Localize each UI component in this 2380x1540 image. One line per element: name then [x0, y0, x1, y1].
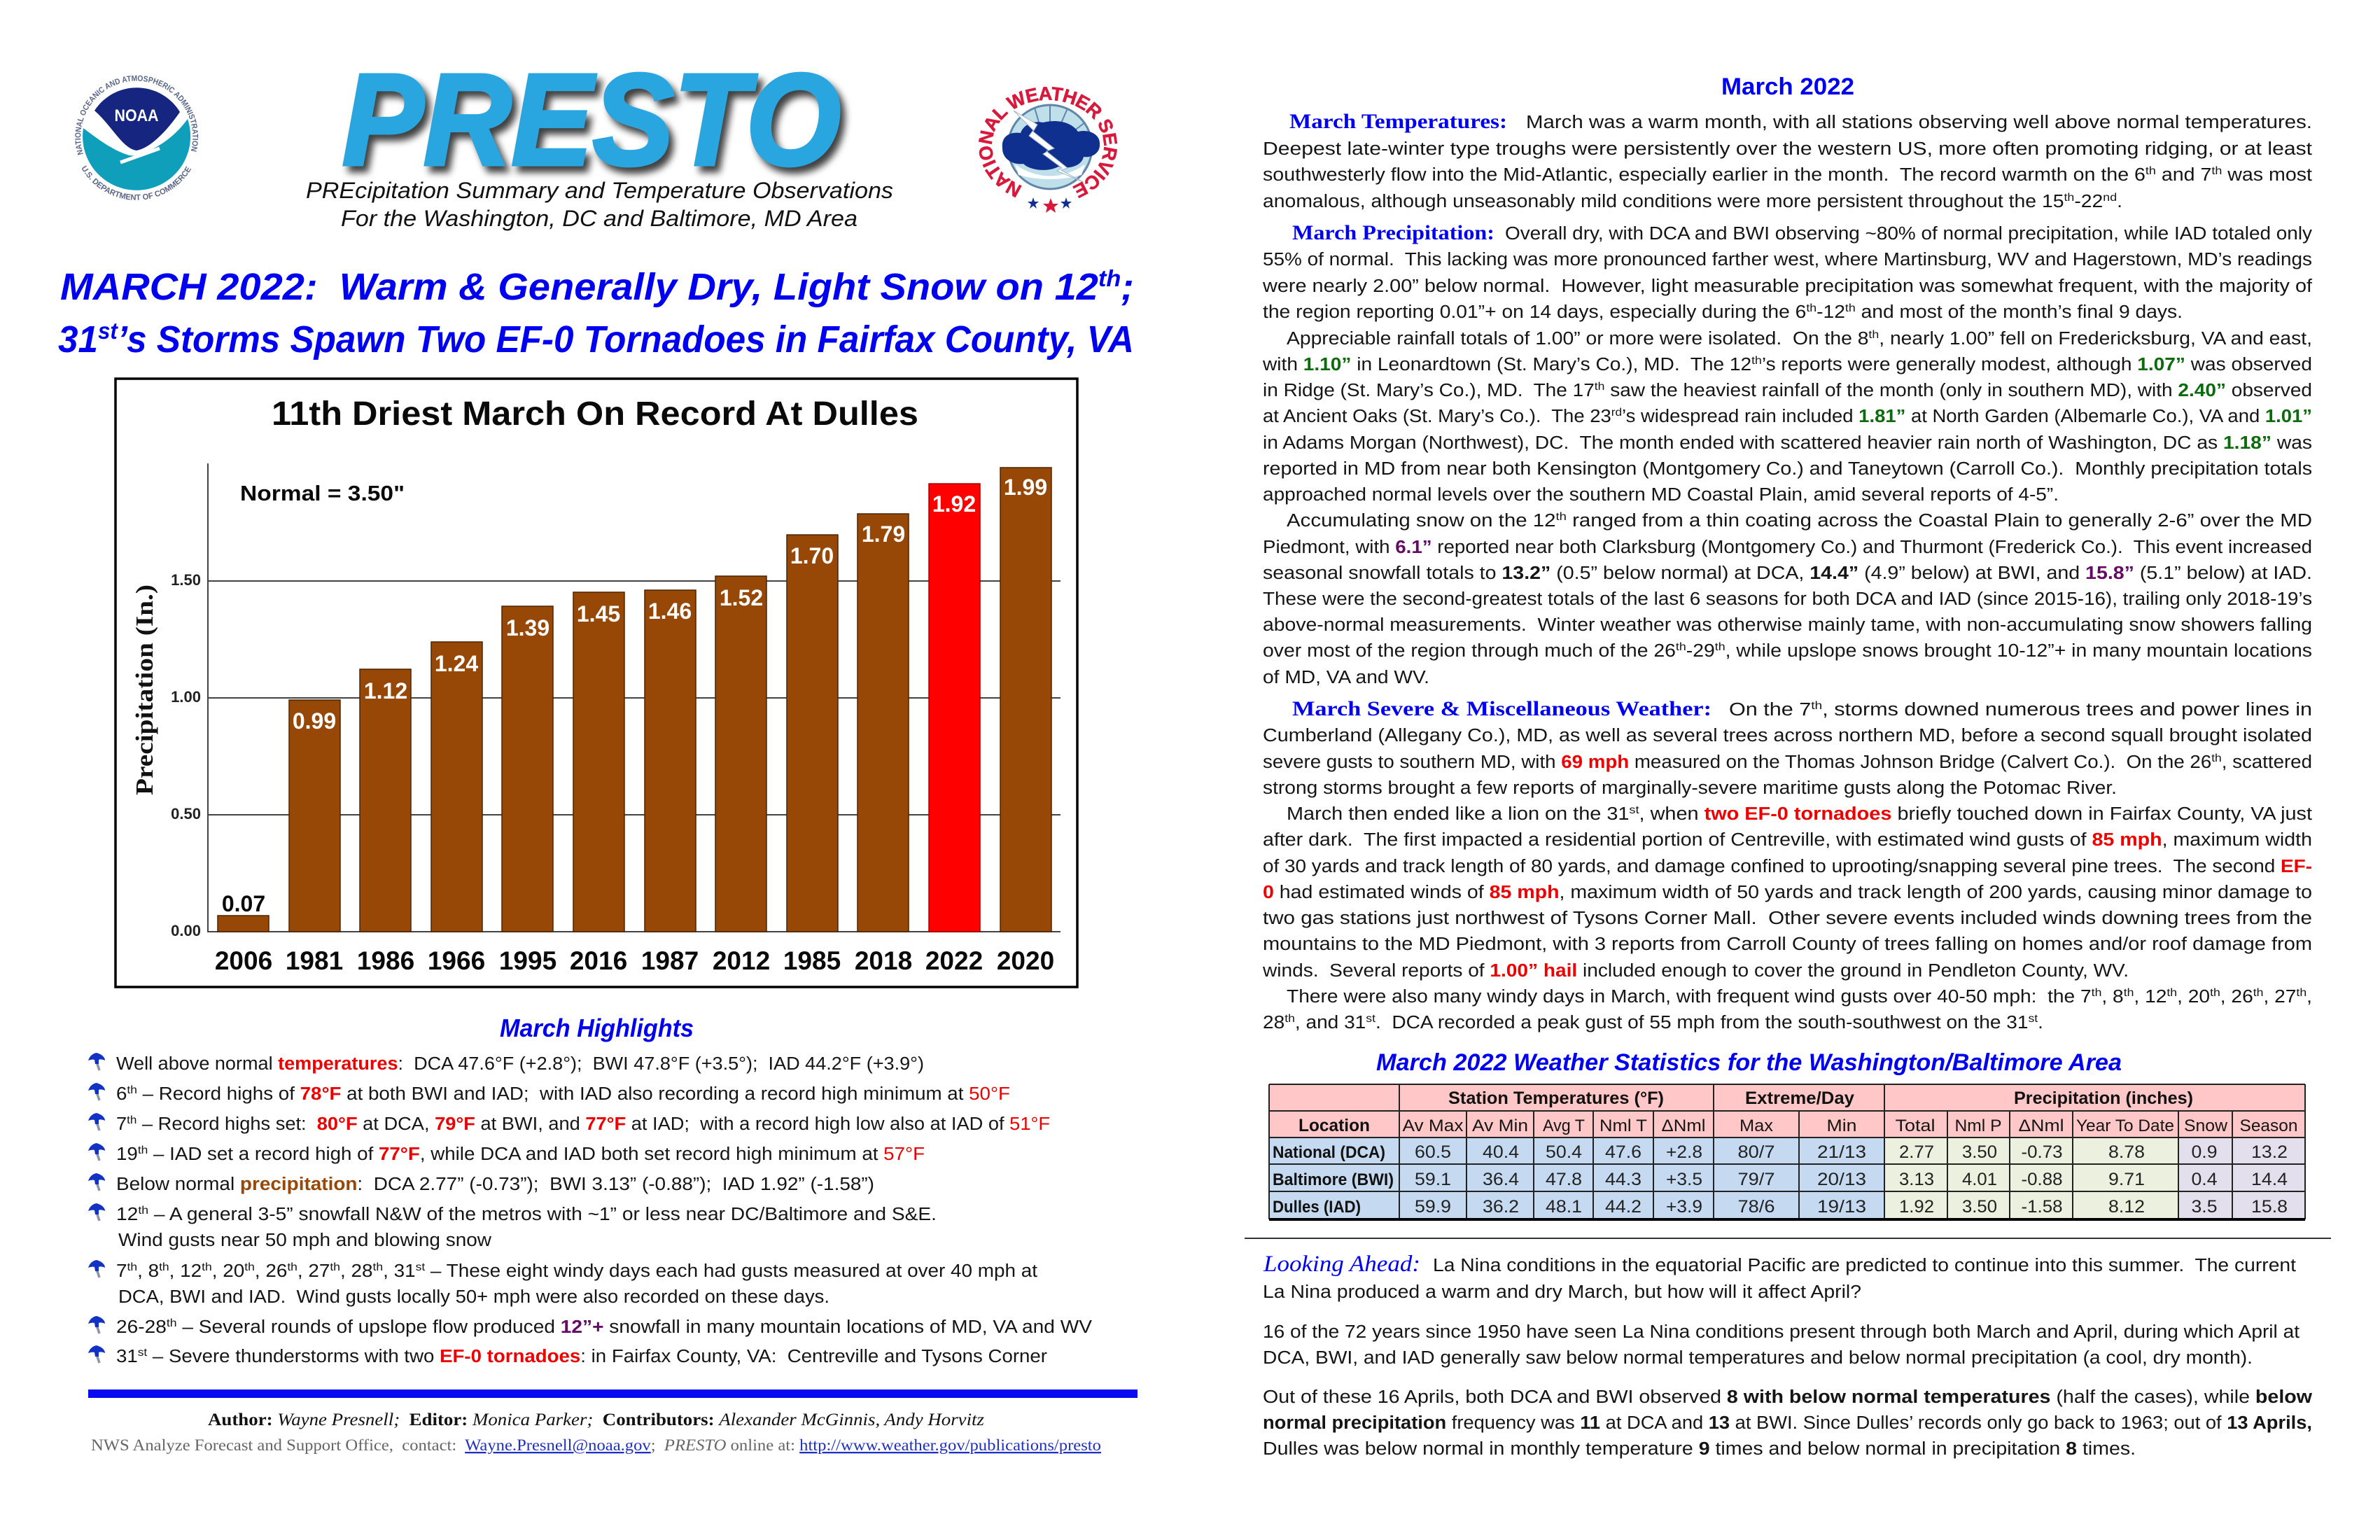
paragraph: tornadoes: 0 had estimated winds of 85 mph , maximum width of 50 yards and track length of 200 yards, causing minor damage to — [1263, 883, 2312, 902]
table row: Baltimore: 47.8 — [1546, 1170, 1582, 1189]
paragraph: statistics: Out of these 16 Aprils, both DCA and BWI observed 8 with below normal temperatures (half the cases), while below — [1263, 1387, 2312, 1407]
paragraph: storms: severe gusts to southern MD, with 69 mph measured on the Thomas Johnson Bridge (Calvert Co.). On the 26 th, scattered — [1263, 752, 2312, 772]
panel: March Highlights — [88, 1014, 1092, 1366]
table row: Baltimore: 4.01 — [1962, 1170, 1997, 1189]
table row: National: 21/13 — [1817, 1142, 1866, 1162]
table row: Baltimore: Baltimore (BWI) — [1273, 1170, 1394, 1189]
bar values: 1.70 — [790, 543, 834, 568]
paragraph: snow: over most of the region through much of the 26 th-29 th, while upslope snows brought 10-12”+ in many mountain locations — [1263, 641, 2312, 661]
paragraph: rainfall: Appreciable rainfall totals of 1.00” or more were isolated. On the 8 th, nearly 1.00” fell on Fredericksburg, VA and east, — [1287, 329, 2312, 349]
bar values: 1.12 — [364, 678, 407, 704]
table group headers: Precipitation (inches) — [2014, 1088, 2193, 1108]
table column headers: Location — [1298, 1116, 1370, 1135]
table column headers: Total — [1896, 1116, 1935, 1135]
paragraph: tornadoes: March then ended like a lion on the 31 st, when two EF-0 tornadoes briefly touched down in Fairfax County, VA just — [1287, 804, 2312, 824]
NWS dial spokes — [1035, 105, 1085, 133]
highlight list: Wind gusts near 50 mph and blowing snow — [118, 1231, 492, 1250]
subhead: March Temperatures: — [1289, 110, 1507, 133]
table column headers: Year To Date — [2076, 1116, 2174, 1135]
y axis labels — [171, 571, 201, 939]
table row: National: 2.77 — [1899, 1142, 1934, 1162]
table row: National: -0.73 — [2022, 1142, 2062, 1162]
table heading: March 2022 Weather Statistics for the Washington/Baltimore Area — [1376, 1049, 2122, 1076]
year labels: 2018 — [855, 946, 912, 975]
y axis title: Precipitation (In.) — [131, 584, 158, 795]
paragraph: tornadoes — [1262, 804, 2312, 981]
paragraph: history: 16 of the 72 years since 1950 have seen La Nina conditions present through both March and April, during which April at — [1263, 1322, 2300, 1342]
logo: National Weather Service — [979, 87, 1117, 213]
table column headers: ΔNml — [1662, 1116, 1705, 1135]
author line: Author: Wayne Presnell; Editor: Monica Parker; Contributors: Alexander McGinnis, Andy Horvitz — [208, 1410, 984, 1429]
paragraph: rainfall: reported in MD from near both Kensington (Montgomery Co.) and Taneytown (Carroll Co.). Monthly precipitation totals — [1263, 459, 2312, 479]
paragraph — [1263, 113, 2312, 211]
table row: National: 50.4 — [1546, 1142, 1582, 1162]
paragraph: snow: above-normal measurements. Winter weather was otherwise mainly tame, with non-accumulating snow showers falling — [1263, 615, 2312, 635]
table row: Baltimore: -0.88 — [2022, 1170, 2062, 1189]
highlight list: 6th – Record highs of 78°F at both BWI and IAD; with IAD also recording a record high minimum at 50°F — [116, 1084, 1010, 1104]
table row: Dulles — [1273, 1197, 2288, 1217]
bar values: 1.99 — [1004, 475, 1047, 500]
section: March Severe & Miscellaneous Weather — [1262, 697, 2312, 1032]
year labels: 2006 — [215, 946, 272, 975]
paragraph: overview — [1262, 224, 2313, 322]
blue divider bar — [88, 1390, 1138, 1398]
statistics table — [1269, 1084, 2305, 1219]
year labels — [215, 946, 1054, 975]
paragraph: rainfall: in Ridge (St. Mary’s Co.), MD. The 17 th saw the heaviest rainfall of the month (only in southern MD), with 2.40” observed — [1263, 381, 2312, 400]
paragraph: statistics — [1263, 1387, 2312, 1459]
bar values — [222, 475, 1047, 916]
table row: National: 3.50 — [1962, 1142, 1997, 1162]
paragraph: overview: the region reporting 0.01”+ on 14 days, especially during the 6 th-12th and most of the month’s final 9 days. — [1263, 302, 2183, 322]
table group headers: Station Temperatures (°F) — [1448, 1088, 1664, 1108]
y axis labels: 0.00 — [171, 922, 201, 939]
paragraph: wind — [1263, 987, 2312, 1032]
bar values: 1.46 — [648, 598, 692, 624]
highlight list: Below normal precipitation : DCA 2.77” (-0.73”); BWI 3.13” (-0.88”); IAD 1.92” (-1.58”) — [116, 1175, 874, 1194]
NOAA navy sky — [94, 88, 180, 150]
table row: Dulles: 1.92 — [1899, 1197, 1934, 1217]
y axis labels: 1.50 — [171, 571, 201, 589]
table row: National: 8.78 — [2108, 1142, 2145, 1162]
credits — [91, 1410, 1101, 1454]
year labels: 2020 — [997, 946, 1054, 975]
paragraph: outlook: La Nina produced a warm and dry March, but how will it affect April? — [1263, 1282, 1861, 1302]
table row: Dulles: 3.5 — [2191, 1197, 2218, 1217]
paragraph: wind: 28th, and 31 st. DCA recorded a peak gust of 55 mph from the south-southwest on the 31 st. — [1263, 1013, 2043, 1032]
NWS cloud — [1002, 121, 1100, 170]
table row: Dulles: 48.1 — [1546, 1197, 1582, 1217]
y axis labels: 0.50 — [171, 805, 201, 822]
NWS white band — [1015, 164, 1085, 179]
table row: Dulles: 78/6 — [1737, 1197, 1775, 1217]
heading: March 2022: March 2022 — [1721, 74, 1854, 100]
table column headers: Nml T — [1600, 1116, 1647, 1135]
chart frame — [115, 379, 1077, 987]
title line 1: MARCH 2022: Warm & Generally Dry, Light Snow on 12 th; — [60, 265, 1134, 308]
NOAA teal ocean — [83, 119, 190, 190]
table column headers: Av Min — [1472, 1116, 1528, 1135]
table row: Baltimore: 79/7 — [1737, 1170, 1775, 1189]
table row: Dulles: 36.2 — [1483, 1197, 1519, 1217]
highlight list: 26-28 th – Several rounds of upslope flow produced 12”+ snowfall in many mountain locations of MD, VA and WV — [116, 1317, 1092, 1337]
highlight list: 7th – Record highs set: 80°F at DCA, 79°F at BWI, and 77°F at IAD; with a record high low also at IAD of 51°F — [116, 1114, 1050, 1134]
table row: Baltimore: 0.4 — [2191, 1170, 2218, 1189]
table row: National: 0.9 — [2191, 1142, 2218, 1162]
bar values: 1.92 — [932, 491, 976, 517]
table row: National: 13.2 — [2251, 1142, 2288, 1162]
table row: Dulles: -1.58 — [2022, 1197, 2062, 1217]
bar values: 0.07 — [222, 891, 265, 916]
paragraph: tornadoes: mountains to the MD Piedmont, with 3 reports from Carroll County of trees falling on homes and/or roof damage from — [1263, 934, 2312, 954]
table row: National: 60.5 — [1415, 1142, 1451, 1162]
year labels: 2012 — [713, 946, 770, 975]
paragraph: tornadoes: winds. Several reports of 1.00” hail included enough to cover the ground in Pendleton County, WV. — [1262, 961, 2129, 981]
table group headers: Extreme/Day — [1745, 1088, 1854, 1108]
paragraph: wind: There were also many windy days in March, with frequent wind gusts over 40-50 mph: the 7 th, 8th, 12 th, 20 th, 26 th, 27 th, — [1287, 987, 2312, 1007]
paragraph: rainfall — [1262, 329, 2312, 505]
subhead: March Precipitation: — [1292, 221, 1494, 244]
bar values: 1.39 — [506, 615, 550, 640]
subtitle — [306, 178, 893, 231]
year labels: 2016 — [570, 946, 627, 975]
bar values: 1.79 — [862, 522, 905, 547]
NOAA wordmark: NOAA — [115, 106, 158, 125]
paragraph: snow: These were the second-greatest totals of the last 6 seasons for both DCA and IAD (since 2015-16), trailing only 2018-19’s — [1263, 589, 2312, 609]
highlight list: DCA, BWI and IAD. Wind gusts locally 50+ mph were also recorded on these days. — [118, 1287, 830, 1307]
paragraph: tornadoes: of 30 yards and track length of 80 yards, and damage confined to uprooting/snapping several pine trees. The second EF- — [1263, 857, 2312, 876]
highlight list: 19th – IAD set a record high of 77°F, while DCA and IAD both set record high minimum at 57°F — [116, 1144, 925, 1164]
table row: Dulles: Dulles (IAD) — [1273, 1198, 1361, 1217]
table column headers: Max — [1740, 1116, 1773, 1135]
paragraph: southwesterly flow into the Mid-Atlantic, especially earlier in the month. The record warmth on the 6 th and 7 th was most — [1263, 165, 2312, 185]
NOAA ring text top: NATIONAL OCEANIC AND ATMOSPHERIC ADMINISTRATION — [75, 76, 199, 155]
section: Looking Ahead — [1263, 1252, 2312, 1459]
paragraph: tornadoes: two gas stations just northwest of Tysons Corner Mall. Other severe events included winds downing trees from the — [1263, 909, 2312, 928]
logo: NOAA — [75, 76, 199, 200]
paragraph: rainfall: with 1.10” in Leonardtown (St. Mary’s Co.), MD. The 12 th’s reports were generally modest, although 1.07” was observed — [1262, 355, 2312, 374]
section: March Temperatures — [1263, 110, 2312, 211]
table row: Dulles: 8.12 — [2108, 1197, 2145, 1217]
paragraph: history — [1263, 1322, 2300, 1368]
NWS stars — [1028, 197, 1072, 213]
paragraph: rainfall: in Adams Morgan (Northwest), DC. The month ended with scattered heavier rain north of Washington, DC as 1.18” was — [1263, 433, 2312, 453]
table row: Dulles: 3.50 — [1962, 1197, 1997, 1217]
NOAA gull — [120, 148, 160, 162]
paragraph: overview: were nearly 2.00” below normal. However, light measurable precipitation was somewhat frequent, with the majority of — [1262, 276, 2313, 296]
table group headers — [1448, 1088, 2193, 1108]
table column headers: Min — [1827, 1116, 1856, 1135]
table column headers: Nml P — [1954, 1116, 2002, 1135]
paragraph: snow: Accumulating snow on the 12 th ranged from a thin coating across the Coastal Plain to generally 2-6” over the MD — [1287, 511, 2312, 531]
subtitle line 2: For the Washington, DC and Baltimore, MD Area — [341, 206, 858, 231]
paragraph: history: DCA, BWI, and IAD generally saw below normal temperatures and below normal precipitation (a cool, dry month). — [1263, 1348, 2253, 1368]
bars — [218, 468, 1051, 932]
table row: Baltimore: 44.3 — [1605, 1170, 1642, 1189]
table row: National: 47.6 — [1605, 1142, 1642, 1162]
year labels: 1995 — [499, 946, 556, 975]
paragraph: tornadoes: after dark. The first impacted a residential portion of Centreville, with estimated wind gusts of 85 mph , maximum width — [1263, 830, 2312, 850]
year labels: 1987 — [641, 946, 699, 975]
highlight list: 7th, 8th, 12th, 20th, 26th, 27th, 28th, 31st – These eight windy days each had gusts measured at over 40 mph at — [116, 1261, 1037, 1281]
paragraph: storms: Cumberland (Allegany Co.), MD, as well as several trees across northern MD, before a second squall brought isolated — [1263, 726, 2312, 746]
highlights heading: March Highlights — [500, 1014, 694, 1042]
bar values: 0.99 — [293, 708, 336, 734]
paragraph: anomalous, although unseasonably mild conditions were more persistent throughout the 15 th-22 nd. — [1263, 192, 2122, 211]
table row: Baltimore — [1273, 1170, 2288, 1189]
table row: National: 40.4 — [1483, 1142, 1519, 1162]
year labels: 1986 — [357, 946, 414, 975]
table row: Baltimore: 9.71 — [2108, 1170, 2145, 1189]
paragraph: snow: of MD, VA and WV. — [1263, 668, 1429, 687]
subtitle line 1: PREcipitation Summary and Temperature Observations — [306, 178, 893, 203]
table row: Dulles: 19/13 — [1817, 1197, 1866, 1217]
NWS ring text: NATIONAL WEATHER SERVICE — [979, 87, 1117, 199]
title — [58, 265, 1134, 360]
subhead: Looking Ahead: — [1263, 1252, 1420, 1277]
paragraph: Deepest late-winter type troughs were persistently over the western US, more often promoting ridging, or at least — [1263, 139, 2312, 159]
table row: Dulles: 44.2 — [1605, 1197, 1642, 1217]
highlight list: 12th – A general 3-5” snowfall N&W of the metros with ~1” or less near DC/Baltimore and S&E. — [116, 1205, 937, 1224]
table row: National: 80/7 — [1737, 1142, 1775, 1162]
table column headers: Snow — [2184, 1116, 2228, 1135]
table row: Dulles: +3.9 — [1666, 1197, 1702, 1217]
paragraph: storms: strong storms brought a few reports of marginally-severe maritime gusts along the Potomac River. — [1263, 778, 2117, 798]
bar values: 1.52 — [720, 585, 763, 610]
paragraph: storms — [1263, 700, 2312, 798]
bar values: 1.45 — [577, 601, 620, 626]
table row: National: National (DCA) — [1273, 1143, 1385, 1162]
table row: National: +2.8 — [1666, 1142, 1702, 1162]
logo: PRESTO wordmark: PRESTO — [342, 48, 841, 192]
table row: Dulles: 59.9 — [1415, 1197, 1451, 1217]
paragraph: March was a warm month, with all stations observing well above normal temperatures. — [1526, 113, 2312, 132]
table column headers — [1298, 1116, 2297, 1135]
year labels: 1985 — [783, 946, 841, 975]
table column headers: ΔNml — [2019, 1116, 2064, 1135]
section: March Precipitation — [1262, 221, 2313, 687]
contact line: NWS Analyze Forecast and Support Office, contact: Wayne.Presnell@noaa.gov ; PRESTO online at: http://www.weather.gov/publications/presto — [91, 1436, 1101, 1454]
year labels: 2022 — [925, 946, 983, 975]
paragraph: overview: 55% of normal. This lacking was more pronounced farther west, where Martinsburg, WV and Hagerstown, MD’s readings — [1263, 250, 2312, 270]
NWS lightning — [1014, 111, 1083, 182]
highlight list: 31st – Severe thunderstorms with two EF-0 tornadoes : in Fairfax County, VA: Centreville and Tysons Corner — [116, 1347, 1048, 1366]
year labels: 1981 — [286, 946, 343, 975]
highlight list — [116, 1054, 1092, 1366]
paragraph: rainfall: approached normal levels over the southern MD Coastal Plain, amid several reports of 4-5”. — [1263, 485, 2059, 505]
paragraph: snow: Piedmont, with 6.1” reported near both Clarksburg (Montgomery Co.) and Thurmont (Frederick Co.). This event increased — [1263, 538, 2312, 557]
paragraph: overview: Overall dry, with DCA and BWI observing ~80% of normal precipitation, while IAD totaled only — [1505, 224, 2312, 244]
table row: Baltimore: 14.4 — [2251, 1170, 2288, 1189]
subhead: March Severe & Miscellaneous Weather: — [1292, 697, 1712, 720]
paragraph: rainfall: at Ancient Oaks (St. Mary’s Co.). The 23 rd’s widespread rain included 1.81” at North Garden (Albemarle Co.), VA and 1.01” — [1263, 407, 2312, 426]
panel: bar chart — [115, 379, 1077, 987]
table column headers: Avg T — [1543, 1116, 1585, 1135]
paragraph: storms: On the 7 th, storms downed numerous trees and power lines in — [1729, 700, 2312, 720]
table row: Baltimore: 59.1 — [1415, 1170, 1451, 1189]
table column headers: Season — [2240, 1116, 2297, 1135]
chart title: 11th Driest March On Record At Dulles — [272, 396, 918, 433]
paragraph: outlook — [1263, 1256, 2296, 1302]
NOAA ring text bottom: U.S. DEPARTMENT OF COMMERCE — [82, 165, 192, 200]
year labels: 1966 — [428, 946, 485, 975]
paragraph: snow: seasonal snowfall totals to 13.2” (0.5” below normal) at DCA, 14.4” (4.9” below) at BWI, and 15.8” (5.1” below) at IAD. — [1263, 564, 2312, 583]
table row: Baltimore: 20/13 — [1817, 1170, 1866, 1189]
NWS dial — [1008, 105, 1092, 189]
normal note: Normal = 3.50" — [240, 481, 405, 505]
title line 2: 31st’s Storms Spawn Two EF-0 Tornadoes in Fairfax County, VA — [58, 318, 1134, 360]
table row: Baltimore: +3.5 — [1666, 1170, 1702, 1189]
paragraph: statistics: Dulles was below normal in monthly temperature 9 times and below normal in precipitation 8 times. — [1263, 1439, 2136, 1459]
bar values: 1.24 — [435, 651, 478, 676]
table row: Baltimore: 36.4 — [1483, 1170, 1519, 1189]
table row: Baltimore: 3.13 — [1899, 1170, 1934, 1189]
table column headers: Av Max — [1403, 1116, 1463, 1135]
table row: National — [1273, 1142, 2288, 1162]
paragraph: outlook: La Nina conditions in the equatorial Pacific are predicted to continue into this summer. The current — [1433, 1256, 2296, 1275]
highlight list: Well above normal temperatures : DCA 47.6°F (+2.8°); BWI 47.8°F (+3.5°); IAD 44.2°F (+3.9°) — [116, 1054, 924, 1074]
paragraph: snow — [1263, 511, 2312, 687]
paragraph: statistics: normal precipitation frequency was 11 at DCA and 13 at BWI. Since Dulles’ records only go back to 1963; out of 13 Aprils, — [1263, 1413, 2312, 1433]
table row: Dulles: 15.8 — [2251, 1197, 2288, 1217]
y axis labels: 1.00 — [171, 688, 201, 706]
